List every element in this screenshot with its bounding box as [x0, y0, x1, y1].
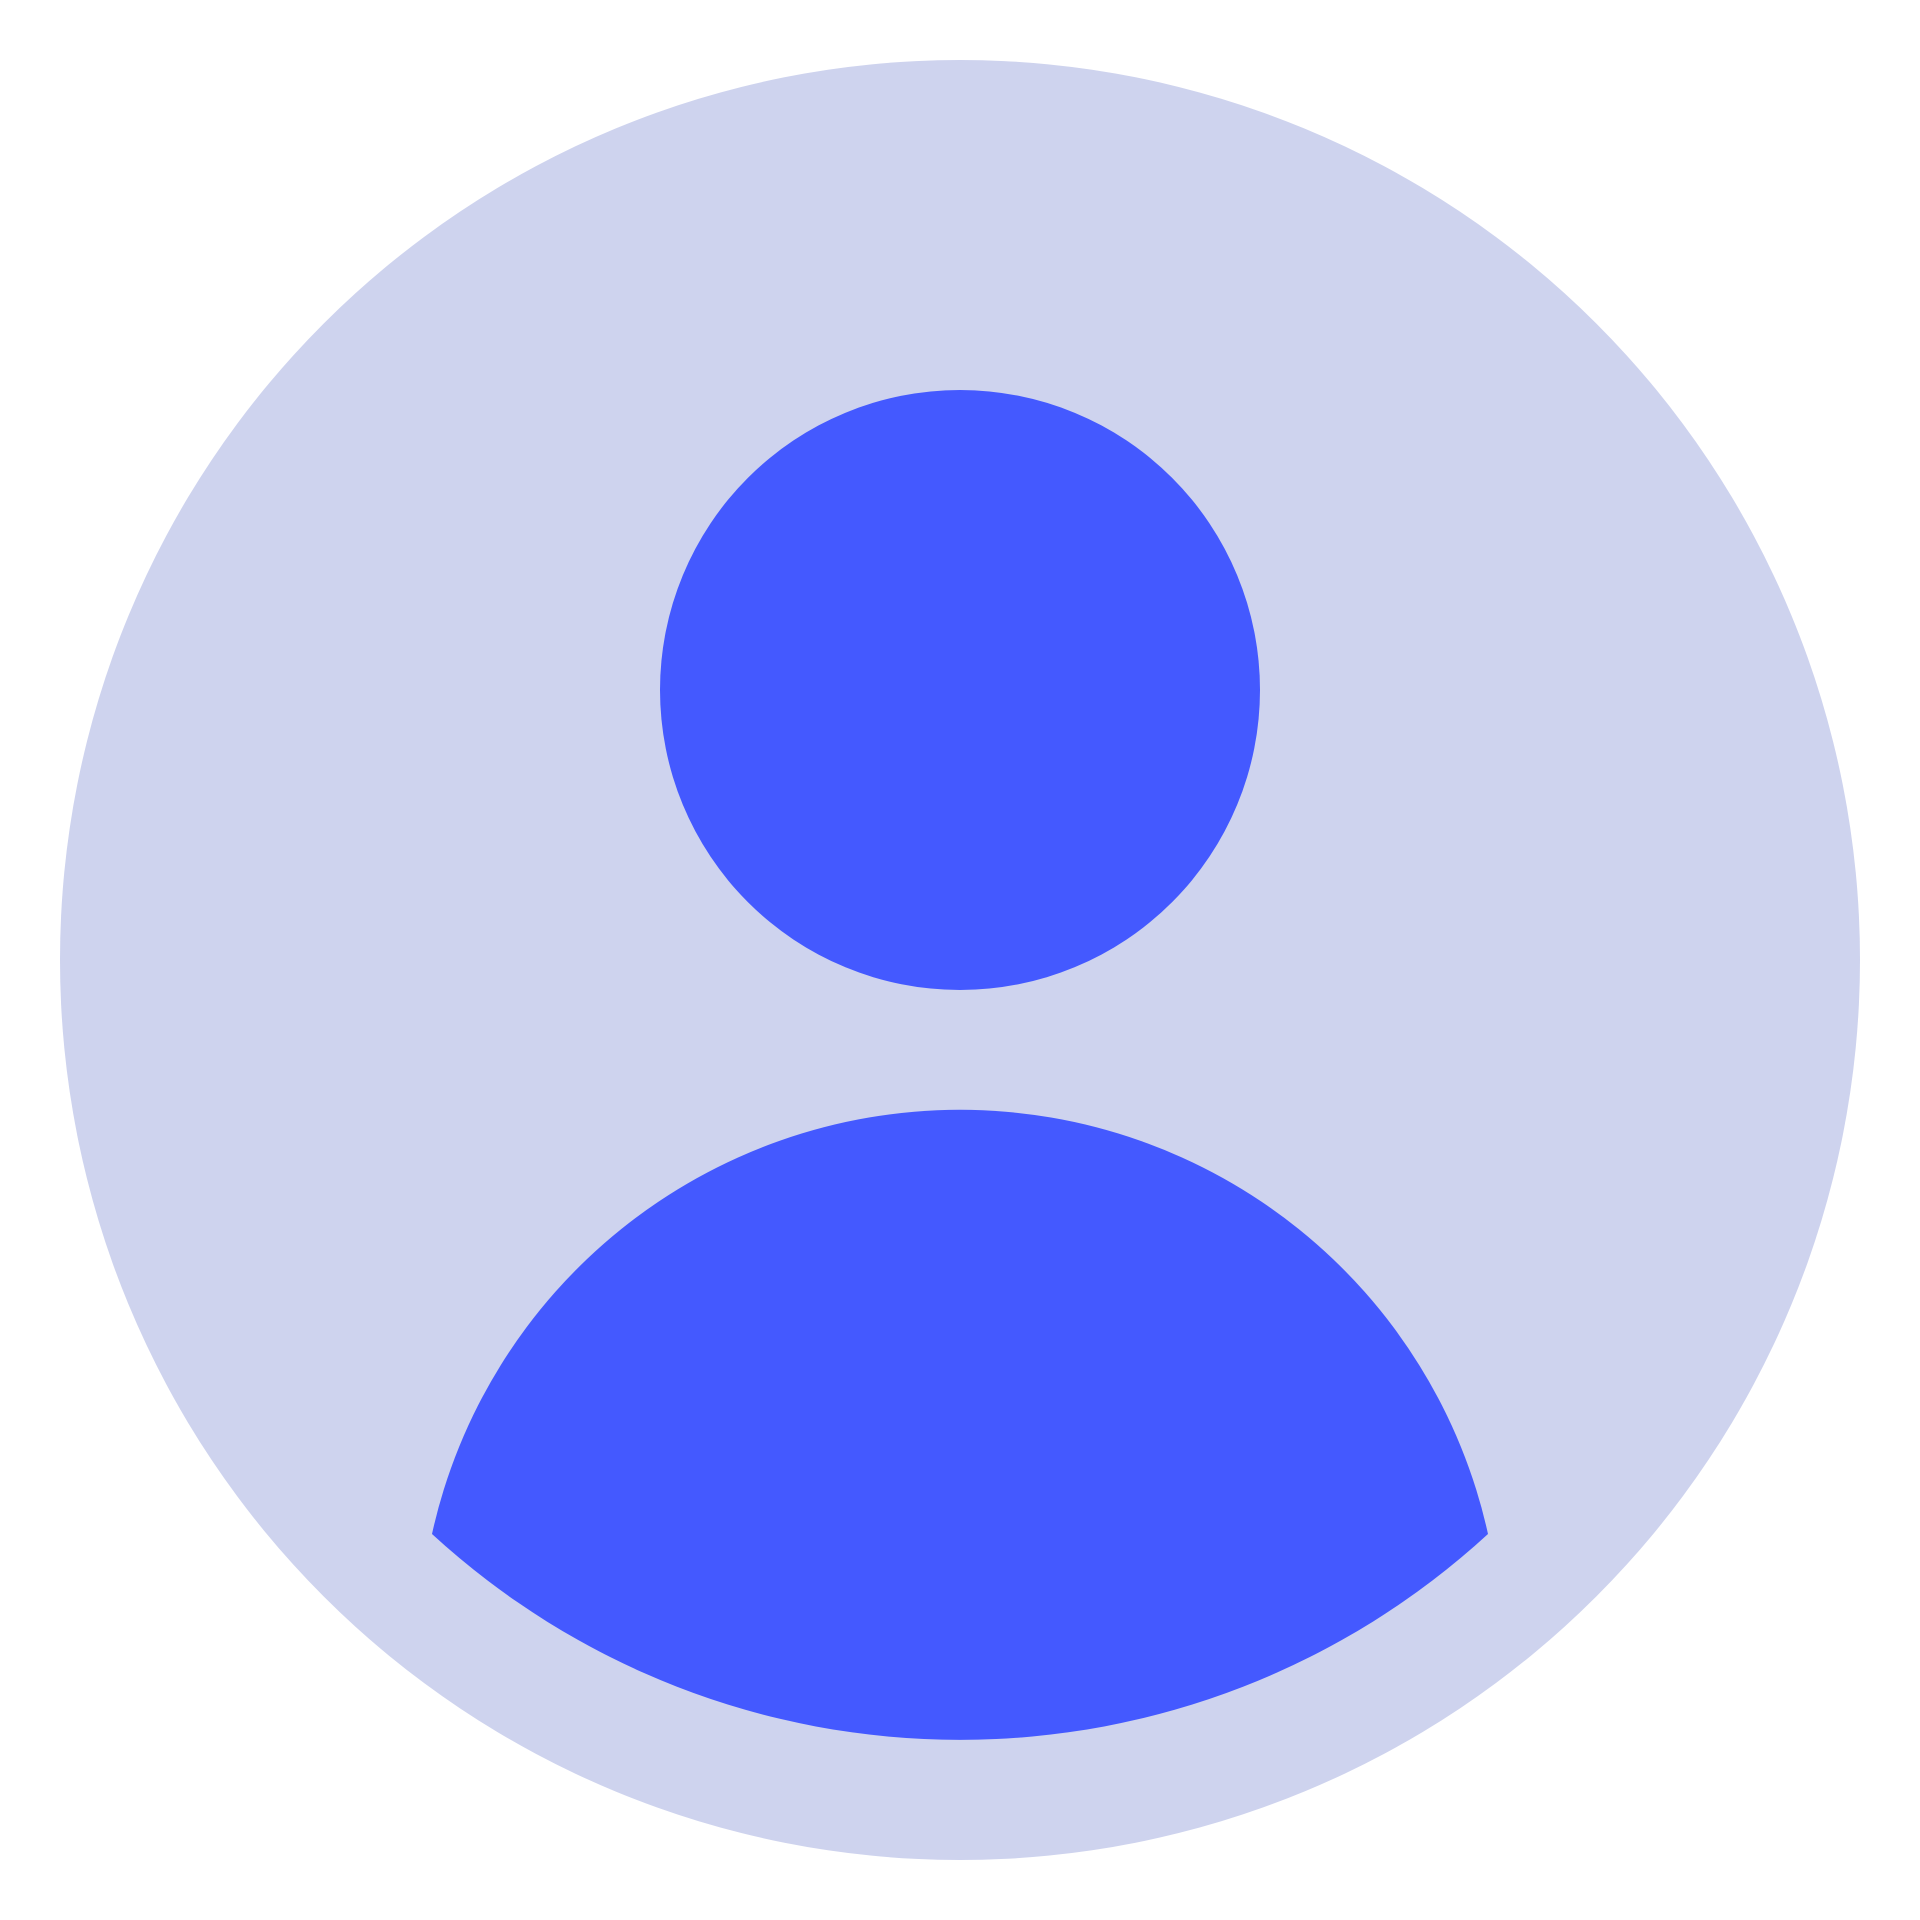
- avatar head: [660, 390, 1260, 990]
- avatar shoulders: [432, 1110, 1488, 1740]
